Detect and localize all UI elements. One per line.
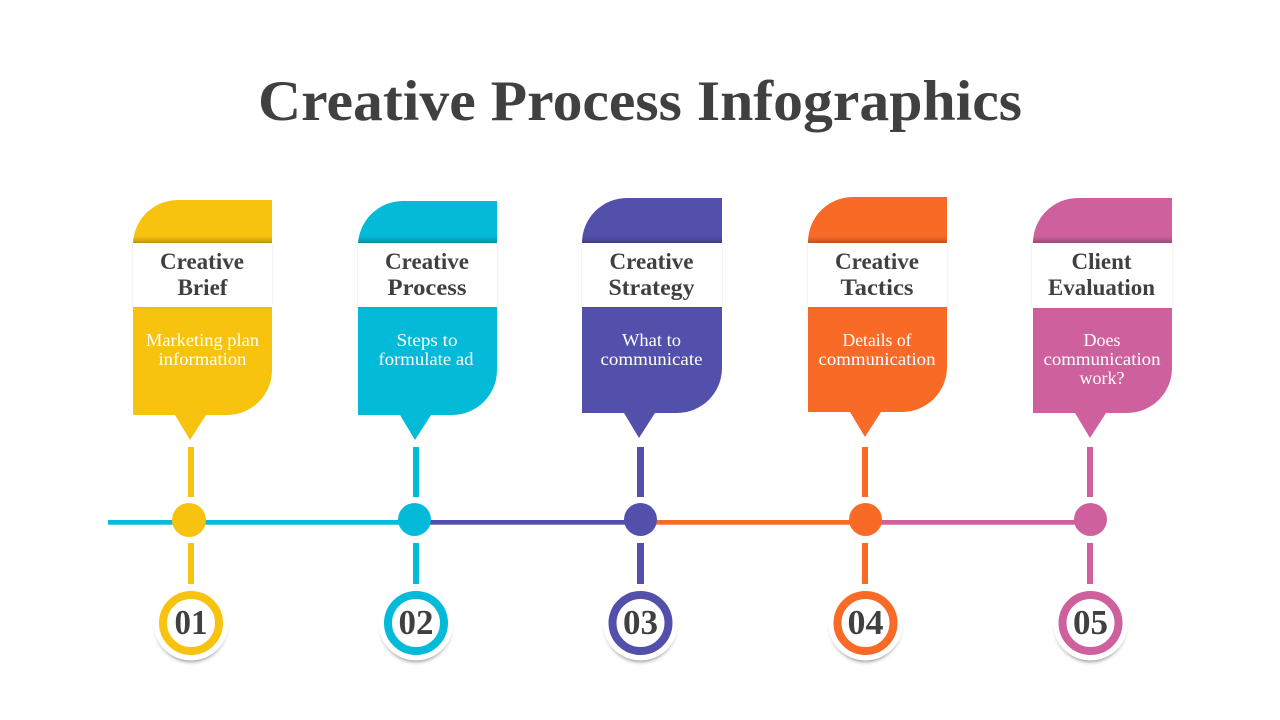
badge 02 — [378, 586, 454, 661]
badge 03 — [603, 586, 678, 661]
badge 05: 05 — [1073, 603, 1108, 642]
description 1: information — [158, 349, 247, 369]
description 2: Steps to — [396, 330, 458, 350]
description 4: Details of — [842, 330, 912, 350]
white band 2 — [358, 243, 497, 307]
header shadow 3 — [582, 236, 722, 243]
connector and node 3 — [624, 447, 657, 584]
connector and node 1 — [172, 447, 206, 584]
header shadow 4 — [808, 236, 947, 243]
badge 02: 02 — [398, 603, 434, 642]
badge 04 — [828, 586, 903, 661]
callout shape 1 — [133, 200, 272, 440]
white band 1 — [133, 243, 272, 307]
badge 03: 03 — [623, 603, 658, 642]
heading 4: Tactics — [840, 275, 914, 301]
connector and node 4 — [849, 447, 882, 584]
panel: step 5 Client Evaluation — [1032, 198, 1172, 438]
timeline line — [108, 520, 1090, 525]
heading 2: Creative — [385, 249, 469, 275]
connector and node 2 — [398, 447, 431, 584]
panel: step 3 Creative Strategy — [582, 198, 722, 438]
description 4: communication — [818, 349, 936, 369]
callout shape 5 — [1033, 198, 1172, 438]
description 5: communication — [1044, 349, 1161, 369]
heading 3: Strategy — [608, 275, 695, 301]
description 3: What to — [622, 330, 681, 350]
heading 2: Process — [388, 275, 466, 301]
badge 01: 01 — [174, 603, 208, 642]
white band 3 — [582, 243, 722, 307]
white band 5 — [1032, 243, 1172, 308]
callout shape 4 — [808, 197, 947, 437]
callout shape 3 — [582, 198, 722, 438]
badge 01 — [154, 586, 228, 661]
connector and node 5 — [1074, 447, 1107, 584]
panel: step 1 Creative Brief — [133, 200, 272, 440]
description 1: Marketing plan — [146, 330, 259, 350]
header shadow 5 — [1033, 236, 1172, 243]
description 5: Does — [1084, 330, 1121, 350]
panel: step 4 Creative Tactics — [808, 197, 947, 437]
description 2: formulate ad — [378, 349, 474, 369]
callout shape 2 — [358, 201, 497, 440]
header shadow 2 — [358, 236, 497, 243]
heading 5: Client — [1072, 249, 1132, 275]
badge 04: 04 — [848, 603, 884, 642]
panel: step 2 Creative Process — [358, 201, 497, 440]
heading 5: Evaluation — [1048, 275, 1155, 301]
white band 4 — [808, 243, 947, 307]
heading 3: Creative — [610, 249, 694, 275]
badge 05 — [1053, 586, 1128, 661]
description 3: communicate — [600, 349, 703, 369]
heading 4: Creative — [835, 249, 919, 275]
header shadow 1 — [133, 236, 272, 243]
title: Creative Process Infographics — [258, 70, 1022, 133]
heading 1: Creative — [160, 249, 244, 275]
heading 1: Brief — [178, 275, 229, 301]
description 5: work? — [1080, 368, 1125, 388]
